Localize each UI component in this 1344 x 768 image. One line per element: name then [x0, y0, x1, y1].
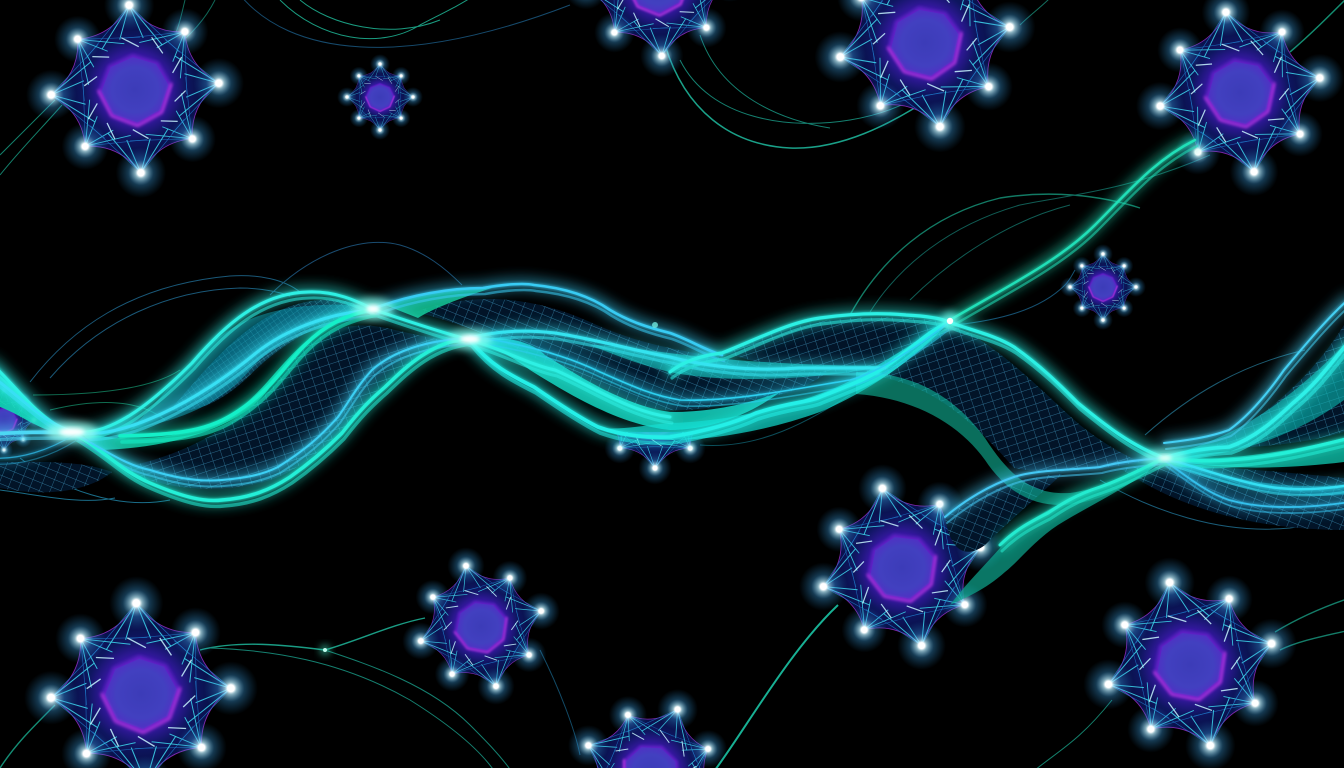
star node 3 cropped at top: [560, 0, 756, 82]
star node 7 beneath wave: [606, 432, 704, 484]
wave crossing flares: [46, 298, 1187, 655]
wave: mesh ribbons: [0, 299, 1344, 552]
star node 8: [774, 439, 1030, 695]
star node 5: [1118, 0, 1344, 214]
star node 12 cropped at bottom: [535, 656, 767, 768]
star node 10: [18, 570, 264, 768]
star node 4: [795, 0, 1055, 172]
star node 9: [383, 528, 579, 724]
wave: bright strands: [0, 140, 1344, 545]
wave: outer glow: [0, 140, 1344, 545]
star node 1: [18, 0, 252, 206]
wave: secondary parallel strands: [0, 146, 1344, 551]
star node 2 small: [337, 54, 423, 140]
wave: translucent glow ribbons: [0, 288, 1344, 605]
star node 13 at left edge: [0, 381, 43, 459]
star node 6 small: [1060, 244, 1146, 330]
wave: soft inner glow: [0, 140, 1344, 545]
star node 11: [1058, 532, 1322, 768]
